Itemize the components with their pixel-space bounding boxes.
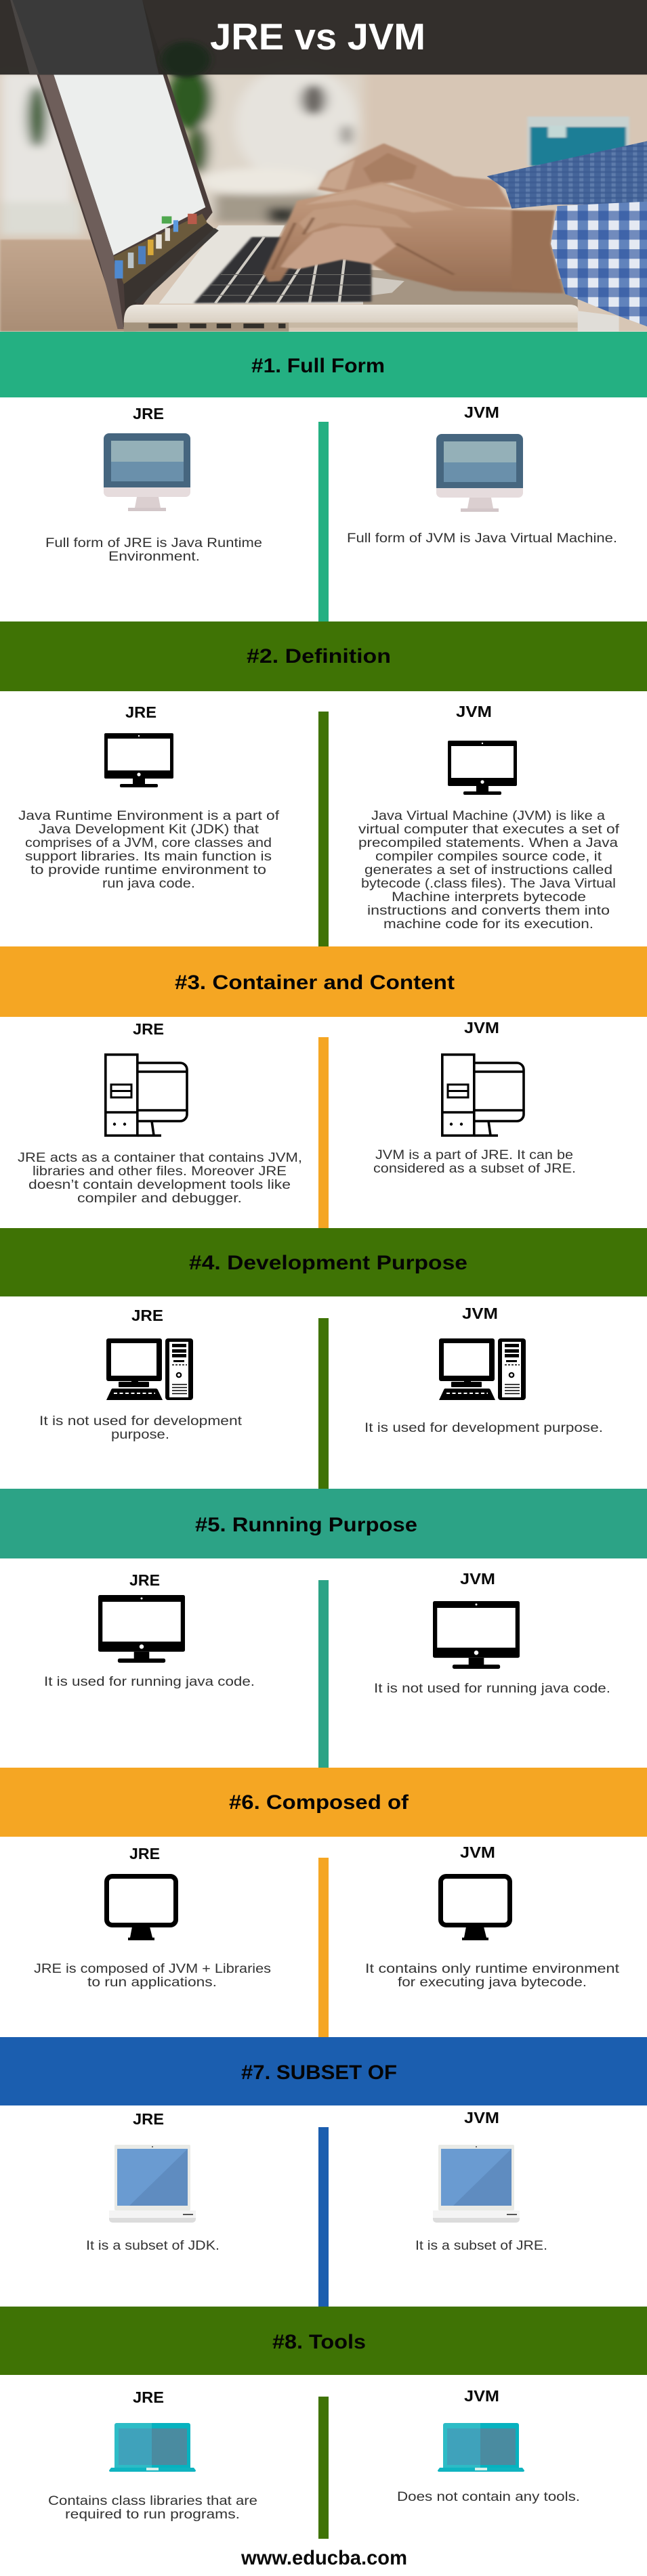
icon: JRE white laptop — [109, 2145, 196, 2223]
section 8 header band — [0, 2307, 647, 2375]
JRE text: Environment. — [108, 550, 200, 564]
JRE text: Contains class libraries that are — [48, 2494, 257, 2508]
section 7 header band — [0, 2037, 647, 2105]
icon: JRE computer — [106, 1055, 187, 1135]
section 3 header band — [0, 946, 647, 1017]
icon: JVM monitor — [433, 1601, 520, 1669]
JVM text — [373, 1148, 576, 1176]
JRE text: JRE is composed of JVM + Libraries — [34, 1962, 271, 1976]
section 5: Running Purpose — [0, 1489, 647, 1768]
section 7: Subset of — [0, 2037, 647, 2307]
JVM text: generates a set of instructions called — [364, 863, 612, 877]
section 1 header band — [0, 332, 647, 397]
icon: JRE monitor — [98, 1595, 185, 1663]
back sleeve — [487, 141, 647, 209]
icon: JVM computer — [442, 1055, 524, 1135]
icon: JRE teal laptop — [109, 2423, 196, 2472]
back hand — [318, 144, 512, 207]
screen bezel and display — [37, 74, 214, 329]
JRE text — [39, 1414, 243, 1442]
section 4: Development Purpose — [0, 1228, 647, 1489]
JRE text: It is a subset of JDK. — [86, 2239, 220, 2253]
JRE text: Java Runtime Environment is a part of — [18, 809, 280, 823]
icon: JVM monitor — [436, 434, 523, 512]
JVM label: JVM — [462, 1305, 498, 1322]
JVM text: precompiled statements. When a Java — [358, 836, 618, 850]
JVM label: JVM — [464, 403, 499, 421]
JRE label: JRE — [133, 405, 164, 422]
JRE label: JRE — [129, 1845, 160, 1862]
laptop deck — [159, 225, 371, 303]
JVM label: JVM — [460, 1843, 495, 1861]
section 5 header band — [0, 1489, 647, 1558]
JVM text: Full form of JVM is Java Virtual Machine. — [347, 531, 617, 546]
section 4 header band — [0, 1228, 647, 1296]
JRE text: run java code. — [102, 877, 195, 891]
icon: JRE monitor — [104, 433, 190, 511]
footer: website: www.educba.com — [241, 2547, 407, 2569]
JRE text — [18, 1151, 302, 1206]
JRE text — [34, 1962, 271, 1990]
JRE text: doesn’t contain development tools like — [28, 1178, 291, 1192]
front cuff — [551, 202, 647, 326]
JRE label: JRE — [133, 2110, 164, 2128]
JVM text: for executing java bytecode. — [398, 1975, 587, 1990]
JVM text: virtual computer that executes a set of — [358, 823, 620, 837]
JRE text: purpose. — [111, 1428, 169, 1442]
keyboard — [194, 237, 371, 303]
JRE label: JRE — [125, 703, 156, 721]
icon: JRE monitor outline — [107, 1877, 176, 1940]
section 8: Tools — [0, 2307, 647, 2539]
JRE text: comprises of a JVM, core classes and — [25, 836, 272, 850]
section 2: Definition — [0, 621, 647, 946]
JVM label: JVM — [460, 1570, 495, 1588]
JVM text — [358, 809, 620, 932]
JRE text: to run applications. — [87, 1975, 217, 1990]
JRE label: JRE — [129, 1571, 160, 1589]
JRE label: JRE — [133, 2388, 164, 2406]
JRE text: JRE acts as a container that contains JVM, — [18, 1151, 302, 1165]
JVM text: It is used for development purpose. — [364, 1421, 603, 1435]
icon: JVM monitor outline — [440, 1877, 509, 1940]
JVM text: compiler compiles source code, it — [375, 850, 602, 864]
icon: JVM monitor — [448, 741, 517, 795]
section 5 heading: #5. Running Purpose — [195, 1514, 417, 1536]
JVM text: It is a subset of JRE. — [415, 2239, 547, 2253]
section 3: Container and Content — [0, 946, 647, 1228]
section 2 header band — [0, 621, 647, 691]
JRE text: support libraries. Its main function is — [25, 850, 272, 864]
JRE text: Java Development Kit (JDK) that — [39, 823, 259, 837]
icon: JVM white laptop — [433, 2145, 520, 2223]
JRE text: It is not used for development — [39, 1414, 243, 1428]
JRE text: compiler and debugger. — [77, 1192, 242, 1206]
JVM text: Java Virtual Machine (JVM) is like a — [371, 809, 605, 823]
section 6 header band — [0, 1768, 647, 1837]
JVM text: It contains only runtime environment — [365, 1962, 620, 1976]
icon: JRE desktop and tower — [106, 1338, 193, 1400]
JRE text: It is used for running java code. — [44, 1675, 255, 1689]
section 6: Composed of — [0, 1768, 647, 2037]
JRE label: JRE — [133, 1020, 164, 1038]
JVM text: machine code for its execution. — [383, 917, 593, 932]
JRE text: libraries and other files. Moreover JRE — [33, 1164, 287, 1179]
teal cup — [527, 116, 629, 166]
front hand — [264, 182, 563, 293]
section 8 heading: #8. Tools — [272, 2331, 366, 2353]
JVM text: JVM is a part of JRE. It can be — [375, 1148, 573, 1162]
icon: JRE monitor — [104, 733, 173, 787]
JVM label: JVM — [464, 2109, 499, 2126]
JVM text — [365, 1962, 620, 1990]
section 1: Full Form — [0, 332, 647, 621]
JVM text: bytecode (.class files). The Java Virtual — [361, 877, 616, 891]
section 6 heading: #6. Composed of — [229, 1791, 409, 1814]
JRE text: to provide runtime environment to — [30, 863, 266, 877]
JRE text — [18, 809, 280, 891]
JRE label: JRE — [131, 1307, 163, 1324]
hero photo: hands typing on a laptop — [0, 0, 647, 332]
section 4 heading: #4. Development Purpose — [189, 1252, 467, 1274]
JVM text: It is not used for running java code. — [374, 1682, 610, 1696]
JVM label: JVM — [464, 1019, 499, 1036]
section 7 heading: #7. SUBSET OF — [241, 2061, 397, 2084]
section 3 heading: #3. Container and Content — [175, 972, 455, 994]
icon: JVM teal laptop — [438, 2423, 524, 2472]
JRE text: required to run programs. — [65, 2508, 240, 2522]
icon: JVM desktop and tower — [439, 1338, 526, 1400]
JVM text: Does not contain any tools. — [397, 2490, 580, 2504]
title: JRE vs JVM: JRE vs JVM — [210, 16, 425, 58]
JRE text — [48, 2494, 257, 2522]
JRE text: Full form of JRE is Java Runtime — [45, 536, 262, 550]
section 2 heading: #2. Definition — [247, 645, 391, 668]
JRE text — [45, 536, 262, 564]
dark title overlay — [0, 0, 647, 74]
JVM text: instructions and converts them into — [367, 904, 610, 918]
front edge of laptop — [123, 305, 579, 322]
JVM label: JVM — [456, 703, 492, 720]
JVM text: Machine interprets bytecode — [392, 890, 586, 904]
JVM text: considered as a subset of JRE. — [373, 1162, 576, 1176]
section 1 heading: #1. Full Form — [251, 355, 385, 377]
JVM label: JVM — [464, 2387, 499, 2405]
